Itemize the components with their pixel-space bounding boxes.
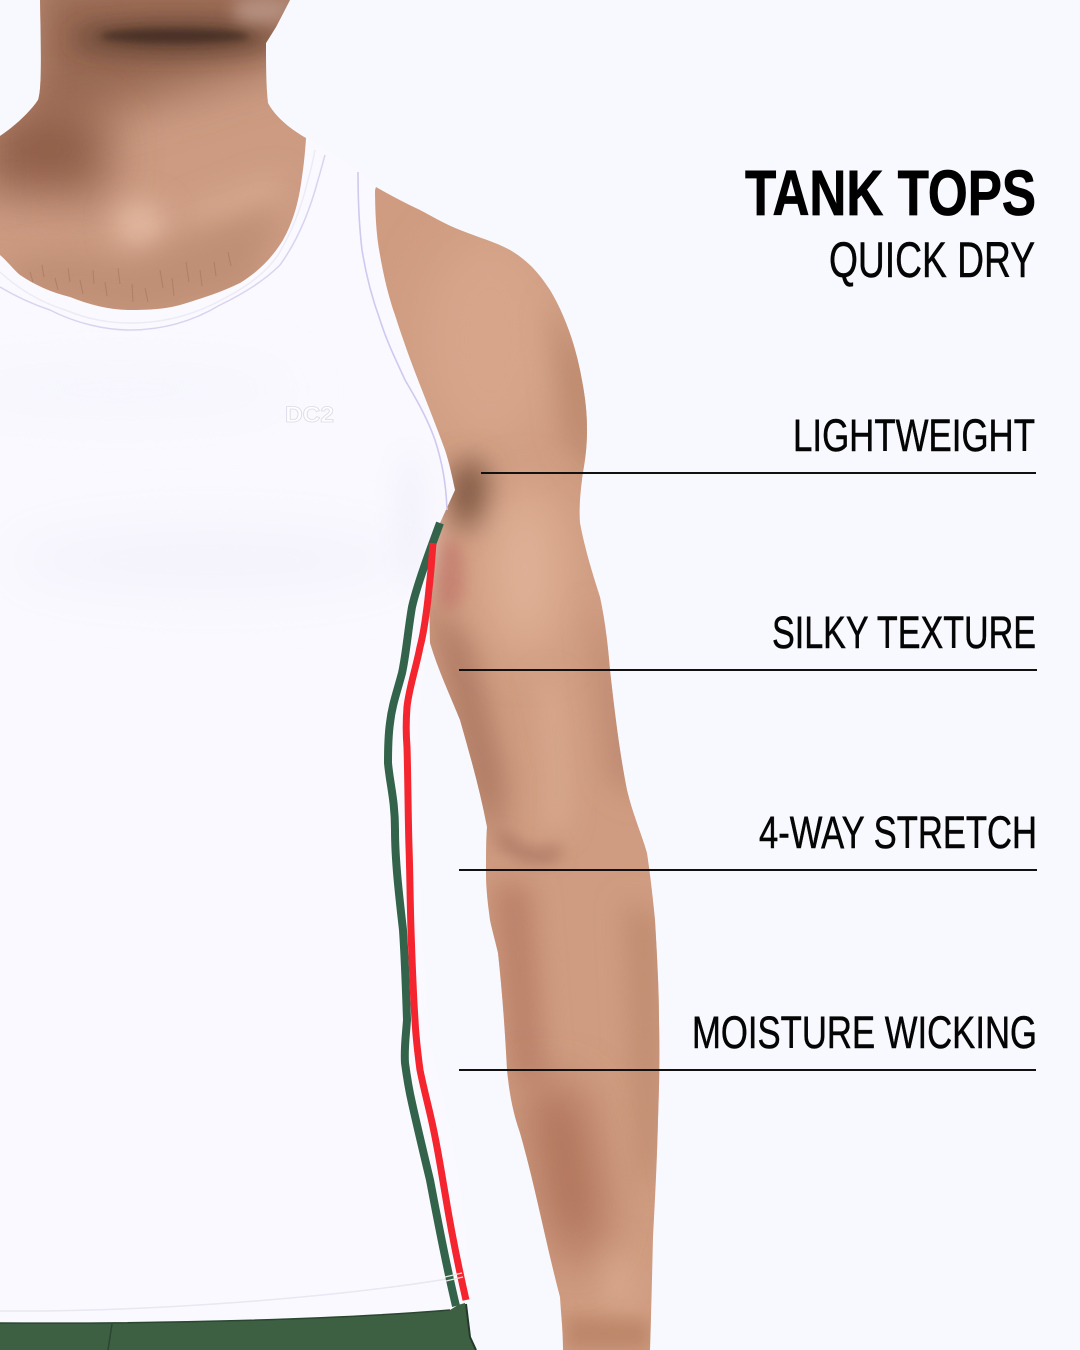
model neck and chest [0, 0, 306, 310]
hem stripe bars [445, 1273, 463, 1281]
armhole piping [358, 172, 447, 510]
tank top [0, 138, 469, 1322]
side stripe: red [406, 543, 466, 1300]
green shorts [0, 1303, 476, 1350]
chest hair [30, 252, 231, 302]
collar binding [0, 155, 325, 330]
side stripe: green [388, 523, 456, 1306]
chest logo: DC2 [285, 402, 334, 427]
model arm [375, 187, 660, 1350]
hem stitch [0, 1279, 447, 1311]
